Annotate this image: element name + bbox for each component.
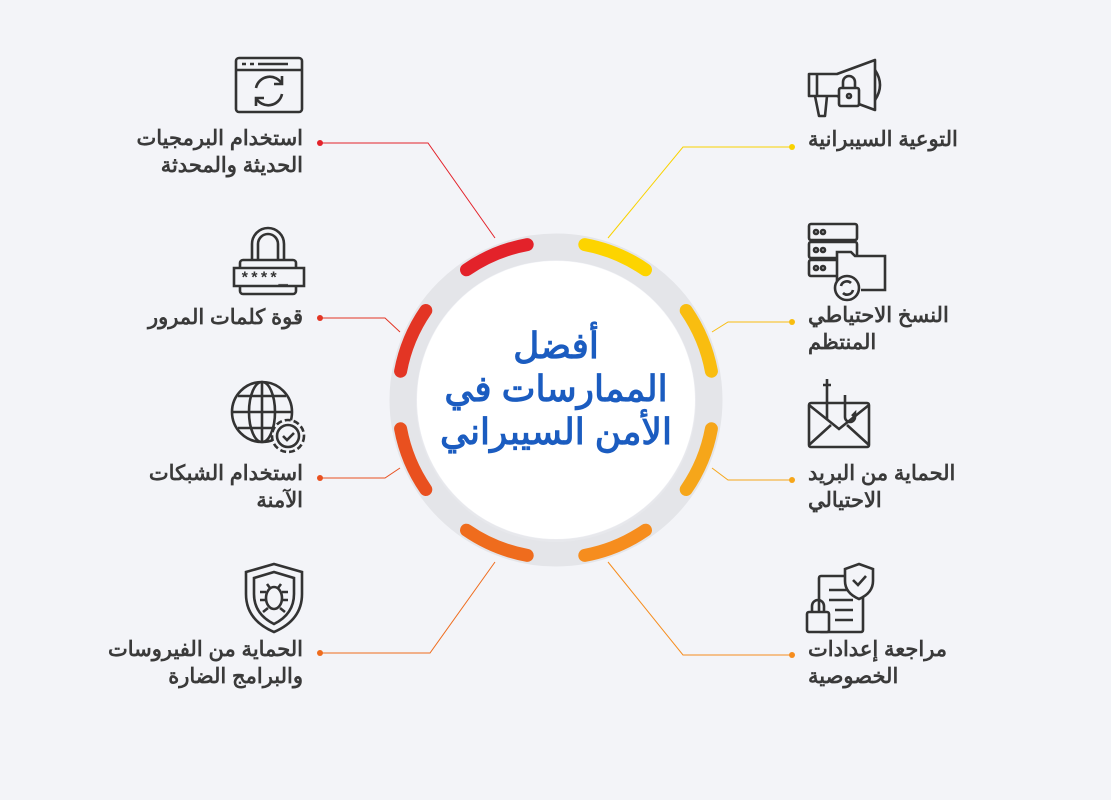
title: [440, 321, 672, 454]
label: الخصوصية: [808, 665, 898, 688]
icon: server folder: [808, 222, 886, 302]
label: التوعية السيبرانية: [808, 128, 958, 151]
gray ring: [403, 247, 709, 553]
icon: padlock password: [232, 226, 306, 296]
label: الحديثة والمحدثة: [161, 154, 303, 177]
title: الأمن السيبراني: [440, 411, 672, 452]
item: passwords: [146, 226, 306, 330]
label: [108, 638, 303, 688]
label: قوة كلمات المرور: [148, 306, 303, 329]
item: awareness: [808, 58, 958, 152]
icon: shield bug: [244, 562, 304, 634]
label: استخدام البرمجيات: [137, 127, 303, 150]
label: استخدام الشبكات: [149, 462, 303, 485]
item: malware: [108, 562, 304, 688]
label: [808, 462, 955, 512]
item: secure networks: [149, 380, 306, 512]
label: الحماية من البريد: [808, 462, 955, 485]
label: الحماية من الفيروسات: [108, 638, 303, 661]
icon: envelope hook: [808, 379, 870, 448]
label: [149, 462, 303, 512]
label: [808, 638, 947, 688]
white circle: [416, 262, 696, 542]
label: [137, 127, 303, 178]
icon: padlock password: ****_: [240, 270, 288, 288]
label: مراجعة إعدادات: [808, 638, 947, 661]
item: backup: [808, 222, 949, 354]
label: [808, 304, 949, 354]
icon: browser refresh: [234, 56, 304, 114]
label: الآمنة: [256, 489, 303, 512]
dots: [317, 140, 795, 658]
label: المنتظم: [808, 331, 876, 354]
segments: [401, 245, 711, 555]
connector lines: [320, 143, 792, 655]
icon: megaphone lock: [808, 58, 882, 118]
item: privacy: [806, 562, 947, 688]
label: النسخ الاحتياطي: [808, 304, 949, 327]
item: updated software: [137, 56, 304, 178]
title: أفضل: [513, 325, 599, 366]
icon: globe gear: [230, 380, 306, 454]
title: الممارسات في: [444, 368, 668, 409]
label: الاحتيالي: [808, 489, 882, 512]
icon: document shield lock: [806, 562, 874, 634]
label: والبرامج الضارة: [168, 665, 303, 688]
item: phishing: [808, 379, 955, 512]
